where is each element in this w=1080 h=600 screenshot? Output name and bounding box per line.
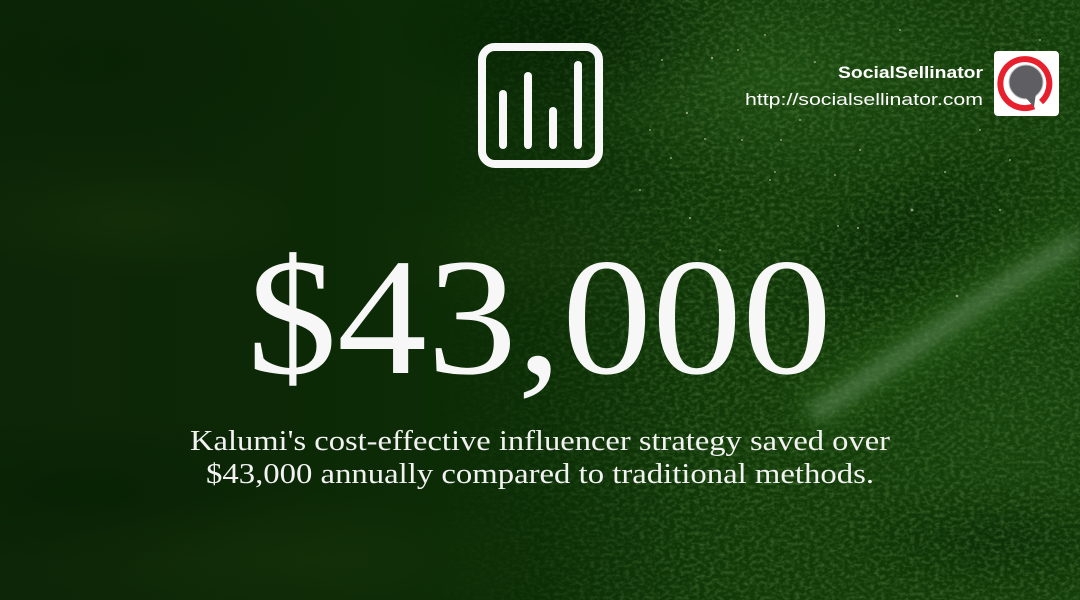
big number: $43,000 <box>247 225 832 410</box>
description text: $43,000 annually compared to traditional methods. <box>206 458 874 490</box>
brand url: http://socialsellinator.com <box>745 90 983 109</box>
description text <box>190 425 890 490</box>
icon: bar chart in rounded square <box>482 47 599 164</box>
description text: Kalumi's cost-effective influencer strategy saved over <box>190 425 890 457</box>
logo: SocialSellinator speech bubble <box>994 51 1059 116</box>
brand name: SocialSellinator <box>838 63 983 82</box>
